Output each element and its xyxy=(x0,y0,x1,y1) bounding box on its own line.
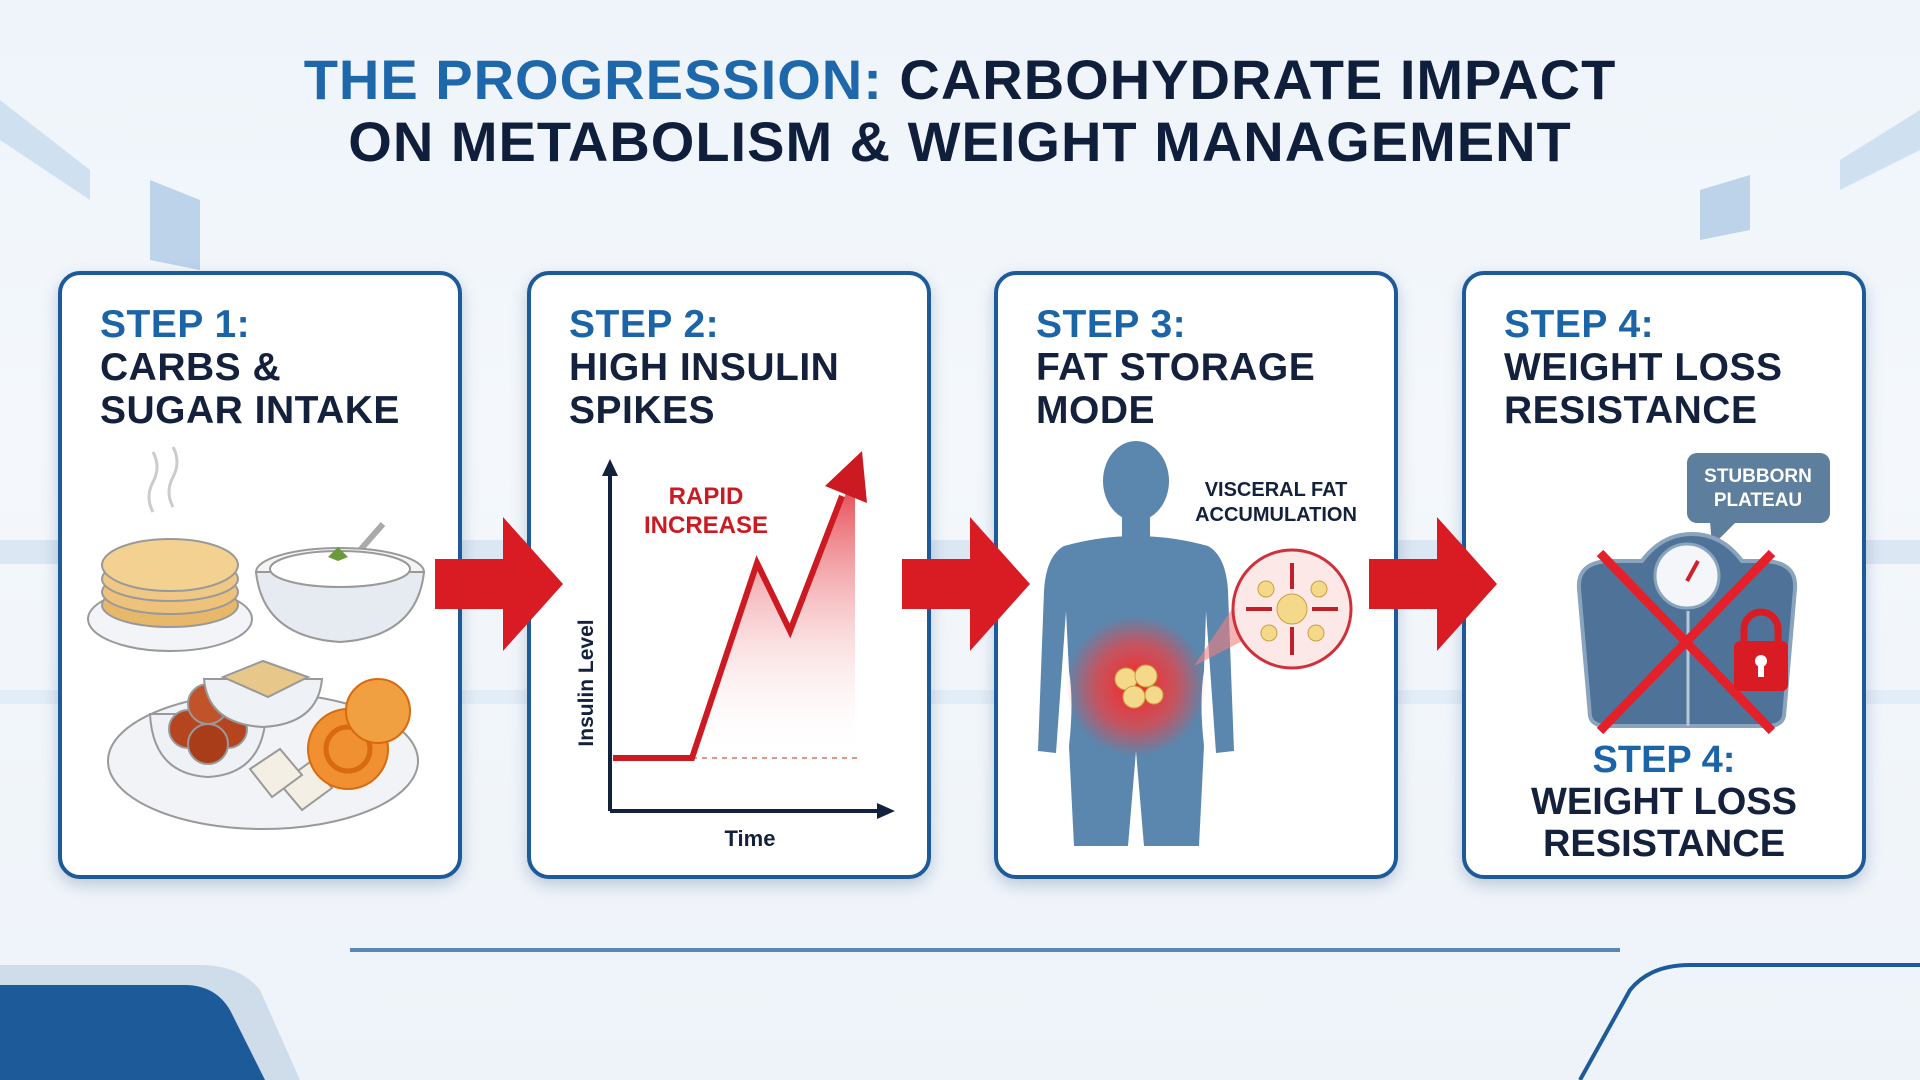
text: step 4 repeat: WEIGHT LOSS xyxy=(1531,781,1797,823)
illustration: body with visceral fat xyxy=(1038,441,1357,846)
title xyxy=(304,48,1616,173)
heading: step 1 xyxy=(100,303,400,432)
heading: step 4: RESISTANCE xyxy=(1504,389,1757,432)
heading: step 2: STEP 2: xyxy=(569,303,719,346)
title: ON METABOLISM & WEIGHT MANAGEMENT xyxy=(348,110,1572,173)
text: step 4 repeat xyxy=(1531,739,1797,865)
illustration: food xyxy=(87,446,426,830)
heading: step 2 xyxy=(569,303,839,432)
chart: insulin spike: INCREASE xyxy=(644,512,768,539)
illustration: locked scale: STUBBORN xyxy=(1704,466,1812,487)
heading: step 1: STEP 1: xyxy=(100,303,250,346)
arrow 1 xyxy=(435,517,563,651)
illustration: locked scale xyxy=(1576,453,1830,734)
chart: insulin spike: Time xyxy=(725,826,775,851)
heading: step 3: FAT STORAGE xyxy=(1036,346,1315,389)
heading: step 1: CARBS & xyxy=(100,346,281,389)
heading: step 1: SUGAR INTAKE xyxy=(100,389,400,432)
chart: insulin spike xyxy=(575,451,895,851)
heading: step 3 xyxy=(1036,303,1315,432)
illustration: body with visceral fat: VISCERAL FAT xyxy=(1205,479,1347,501)
text: step 4 repeat: STEP 4: xyxy=(1593,739,1735,781)
panel: step 4 xyxy=(1462,271,1866,879)
text: step 4 repeat: RESISTANCE xyxy=(1543,823,1785,865)
heading: step 3: MODE xyxy=(1036,389,1155,432)
heading: step 4 xyxy=(1504,303,1782,432)
arrow 2 xyxy=(902,517,1030,651)
chart: insulin spike: RAPID xyxy=(669,483,743,510)
panel: step 1 xyxy=(58,271,462,879)
title: THE PROGRESSION: CARBOHYDRATE IMPACT xyxy=(304,48,1616,111)
panel: step 2 xyxy=(527,271,931,879)
heading: step 2: SPIKES xyxy=(569,389,715,432)
heading: step 3: STEP 3: xyxy=(1036,303,1186,346)
illustration: locked scale: PLATEAU xyxy=(1714,490,1802,511)
heading: step 2: HIGH INSULIN xyxy=(569,346,839,389)
arrow 3 xyxy=(1369,517,1497,651)
chart: insulin spike: Insulin Level xyxy=(575,619,598,747)
heading: step 4: WEIGHT LOSS xyxy=(1504,346,1782,389)
panel: step 3 xyxy=(994,271,1398,879)
illustration: body with visceral fat: ACCUMULATION xyxy=(1195,504,1357,526)
heading: step 4: STEP 4: xyxy=(1504,303,1654,346)
